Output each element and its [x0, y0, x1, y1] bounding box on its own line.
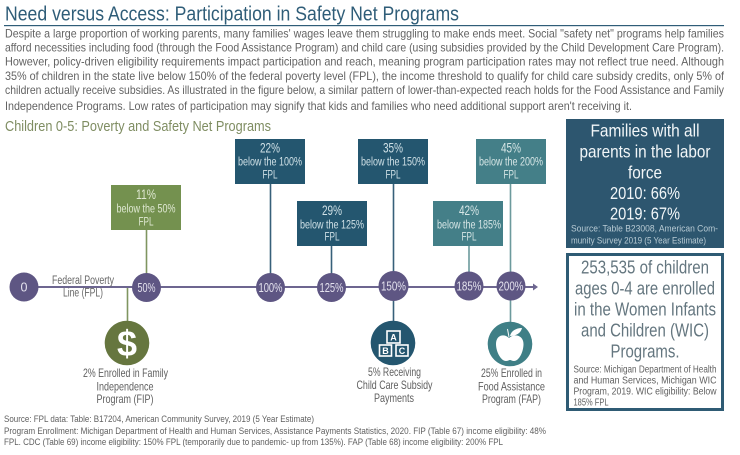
caption: child care subsidy: 5% Receiving — [368, 365, 421, 379]
callout: 22% below 100% FPL — [235, 139, 305, 184]
stat text: 2010: 66% — [610, 183, 680, 203]
callout: 42% below 185% FPL: below the 185% — [437, 220, 501, 232]
intro paragraph — [5, 26, 725, 113]
timeline chart: federal poverty line — [10, 184, 538, 322]
callout: 11% below 50% FPL: FPL — [138, 216, 154, 228]
caption: FAP enrollment: Food Assistance — [478, 380, 545, 394]
callout: 42% below 185% FPL: 42% — [459, 202, 479, 218]
callout: 29% below 125% FPL: 29% — [322, 202, 342, 218]
caption: FAP enrollment: 25% Enrolled in — [481, 366, 542, 380]
callout: 22% below 100% FPL: FPL — [262, 170, 278, 182]
callout: 45% below 200% FPL: below the 200% — [479, 156, 543, 168]
axis node labels: 50% — [138, 281, 156, 295]
source note: Source: Michigan Department of Health — [574, 364, 716, 376]
caption: child care subsidy: Child Care Subsidy — [356, 378, 433, 392]
footnote sources: Source: FPL data: Table: B17204, American Community Survey, 2019 (5 Year Estimate) — [4, 414, 314, 425]
icon: ABC blocks — [371, 321, 415, 365]
callout: 35% below 150% FPL: below the 150% — [361, 156, 425, 168]
callout: 45% below 200% FPL — [476, 139, 546, 184]
callout: 11% below 50% FPL: below the 50% — [116, 204, 176, 216]
panel: WIC enrollment — [568, 254, 722, 410]
stat text: 253,535 of children — [581, 258, 709, 278]
axis node labels — [21, 280, 524, 295]
stat text: parents in the labor — [580, 142, 711, 162]
caption: FIP enrollment: 2% Enrolled in Family — [83, 366, 168, 380]
callout: 35% below 150% FPL: 35% — [383, 140, 403, 156]
axis arrow — [24, 284, 538, 290]
axis node labels: 0 — [21, 280, 28, 294]
icon: ABC blocks: B — [382, 346, 389, 356]
callout: 35% below 150% FPL — [358, 139, 428, 184]
source note: 185% FPL — [574, 398, 609, 408]
icon: dollar sign: $ — [117, 323, 137, 364]
axis label — [52, 275, 114, 300]
callout: 11% below 50% FPL — [111, 185, 181, 230]
caption: FIP enrollment: Independence — [96, 380, 154, 394]
callout: 35% below 150% FPL: FPL — [386, 170, 401, 182]
intro paragraph: Independence Programs. Low rates of participation may signify that kids and families who need additional support aren't receiving it. — [5, 99, 632, 113]
source note: Program, 2019. WIC eligibility: Below — [574, 386, 717, 398]
panel: families in labor force — [566, 119, 724, 248]
caption: FAP enrollment: Program (FAP) — [482, 392, 541, 406]
icon: dollar sign — [105, 321, 149, 365]
caption: FIP enrollment — [83, 366, 168, 406]
stems — [128, 184, 510, 322]
icon: ABC blocks: A — [390, 332, 397, 342]
axis node labels: 100% — [258, 281, 282, 295]
axis nodes — [10, 271, 526, 302]
stat text: and Children (WIC) — [581, 320, 709, 340]
axis node labels: 150% — [381, 280, 406, 294]
axis label: Federal Poverty — [52, 275, 114, 287]
footnote sources — [4, 414, 546, 448]
callout: 22% below 100% FPL: below the 100% — [238, 156, 302, 168]
callout: 45% below 200% FPL: 45% — [501, 140, 521, 156]
icon: apple — [488, 322, 532, 366]
callout: 29% below 125% FPL: FPL — [324, 232, 340, 244]
callout: 29% below 125% FPL — [297, 201, 367, 246]
stat text: Programs. — [610, 342, 680, 362]
callout: 29% below 125% FPL: below the 125% — [300, 220, 364, 232]
axis node labels: 200% — [498, 280, 524, 294]
icon: ABC blocks: C — [399, 346, 406, 356]
source note: munity Survey 2019 (5 Year Estimate) — [571, 236, 706, 246]
source note — [574, 364, 717, 408]
source note — [571, 224, 718, 246]
axis node labels: 125% — [320, 281, 344, 295]
axis label: Line (FPL) — [63, 288, 103, 300]
stat text: in the Women Infants — [574, 300, 716, 320]
footnote sources: FPL. CDC (Table 69) income eligibility: 150% FPL (temporarily due to pandemic- up from 135%). FAP (Table 68) income eligibility: 200% FPL — [4, 437, 503, 448]
axis node labels: 185% — [456, 280, 482, 294]
callout: 42% below 185% FPL — [433, 201, 503, 246]
stat text: Families with all — [590, 120, 700, 140]
source note: Source: Table B23008, American Com- — [571, 224, 718, 234]
callout: 45% below 200% FPL: FPL — [504, 170, 519, 182]
chart heading: Children 0-5: Poverty and Safety Net Programs — [5, 118, 271, 135]
caption: child care subsidy: Payments — [374, 391, 414, 405]
stat text: 2019: 67% — [610, 204, 680, 224]
title: Need versus Access: Participation in Safety Net Programs — [5, 2, 459, 26]
caption: FIP enrollment: Program (FIP) — [96, 392, 154, 406]
stat text: force — [628, 162, 662, 182]
source note: and Human Services, Michigan WIC — [574, 376, 716, 386]
stat text — [574, 258, 716, 362]
callout: 22% below 100% FPL: 22% — [260, 140, 280, 156]
stat text — [580, 120, 711, 224]
caption: child care subsidy — [356, 365, 433, 405]
caption: FAP enrollment — [478, 366, 545, 406]
footnote sources: Program Enrollment: Michigan Department of Health and Human Services, Assistance Payments Statistics, 2020. FIP (Table 67) income eligibility: 48% — [4, 426, 546, 437]
callout: 11% below 50% FPL: 11% — [136, 186, 156, 202]
callout: 42% below 185% FPL: FPL — [462, 232, 477, 244]
